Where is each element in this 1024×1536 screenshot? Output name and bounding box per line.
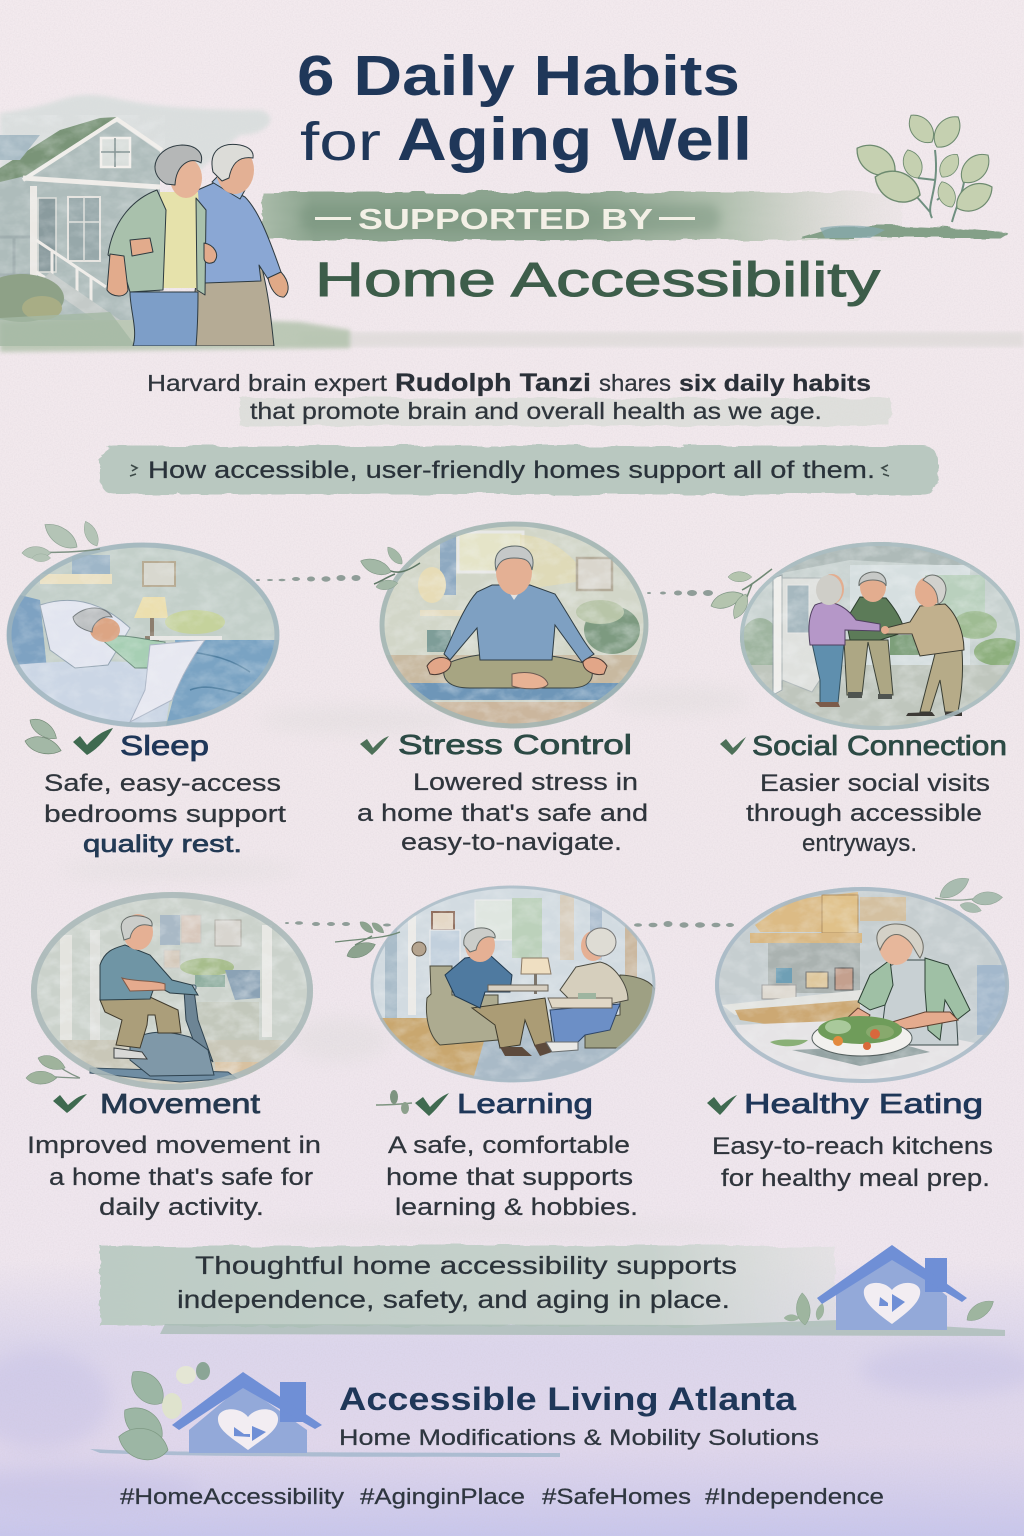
learning: heading and text: home that supports [386, 1164, 633, 1191]
title: 6 Daily Habits [297, 44, 740, 108]
stress control: heading and text [357, 729, 648, 856]
intro text: Rudolph Tanzi [395, 369, 591, 397]
house [0, 115, 165, 320]
social connection: heading and text: entryways. [802, 830, 917, 857]
healthy eating: heading and text [707, 1088, 993, 1192]
icon: leaves and check [376, 1090, 449, 1116]
healthy eating: heading and text: Easy-to-reach kitchens [712, 1133, 993, 1160]
social connection: heading and text [720, 730, 1007, 857]
sleep: heading and text: quality rest. [83, 831, 242, 858]
hashtags: #HomeAccessibility [120, 1484, 344, 1509]
panel: movement illustration [30, 890, 315, 1090]
movement: heading and text: Improved movement in [27, 1132, 321, 1159]
footer company name [339, 1381, 819, 1450]
callout band: How accessible, user-friendly homes support all of them. [148, 457, 875, 484]
sleep: heading and text: Safe, easy-access [44, 770, 281, 797]
leaves: stress branch [358, 544, 420, 591]
leaves: sleep branch [22, 518, 102, 562]
social connection: heading and text: through accessible [746, 800, 982, 827]
bushes [0, 274, 133, 346]
sleep: heading and text: Sleep [120, 730, 209, 761]
closing band [100, 1246, 1005, 1336]
banner: supported by [262, 192, 1008, 240]
icon: check [720, 737, 746, 755]
banner label: SUPPORTED BY [358, 204, 653, 236]
hashtags: #AginginPlace [360, 1484, 525, 1509]
movement: heading and text: Movement [100, 1088, 260, 1119]
closing band: Thoughtful home accessibility supports [195, 1252, 737, 1280]
sleep: heading and text: bedrooms support [44, 801, 286, 828]
connector dots row 2 [285, 921, 734, 928]
movement: heading and text: daily activity. [99, 1194, 264, 1221]
learning: heading and text [376, 1088, 638, 1221]
stress control: heading and text: Stress Control [398, 729, 632, 760]
panel: sleep illustration [0, 540, 285, 730]
stress control: heading and text: Lowered stress in [413, 769, 638, 796]
icon: leaves and check [23, 714, 113, 758]
icon: check [707, 1095, 737, 1115]
leaves: learning branch [335, 919, 400, 962]
connector dots row 1 [256, 575, 713, 596]
learning: heading and text: learning & hobbies. [395, 1194, 638, 1221]
panel: stress control illustration [380, 520, 650, 732]
leaves: movement branch [26, 1052, 80, 1084]
intro text [147, 369, 890, 426]
three seniors greeting [809, 572, 964, 716]
intro text: shares [599, 370, 671, 396]
panel: healthy eating illustration [715, 885, 1011, 1085]
banner label [315, 204, 695, 236]
footer logo: house and plant [90, 1362, 560, 1465]
learning: heading and text: A safe, comfortable [388, 1132, 630, 1159]
leaves: social branch [708, 569, 772, 621]
woman [107, 145, 217, 346]
hashtags: #SafeHomes [542, 1484, 691, 1509]
icon: check [53, 1094, 87, 1113]
hero illustration: house and couple [0, 115, 288, 352]
leaves: eating branch [935, 873, 1003, 915]
leafy plant top right [850, 109, 998, 222]
healthy eating: heading and text: for healthy meal prep. [721, 1165, 990, 1192]
icon: house with heart [784, 1245, 997, 1330]
man meditating [427, 546, 607, 689]
title: Aging Well [397, 106, 752, 173]
hashtags [120, 1484, 884, 1509]
intro text: six daily habits [679, 370, 871, 396]
social connection: heading and text: Social Connection [752, 730, 1007, 761]
intro text: Harvard brain expert [147, 370, 388, 396]
title [297, 44, 752, 173]
callout band [100, 446, 938, 494]
panel: social connection illustration [738, 540, 1024, 735]
senior on recumbent bike [90, 914, 236, 1082]
hashtags: #Independence [705, 1484, 884, 1509]
learning: heading and text: Learning [457, 1088, 593, 1119]
man [187, 144, 288, 346]
closing band: independence, safety, and aging in place. [177, 1286, 730, 1314]
stress control: heading and text: easy-to-navigate. [401, 829, 622, 856]
intro text: that promote brain and overall health as we age. [250, 398, 822, 424]
salad plate [770, 1016, 912, 1056]
icon: check [360, 736, 389, 755]
panel: learning illustration [370, 884, 660, 1090]
hero background mist and ground strip [0, 95, 1024, 352]
sleep: heading and text [23, 714, 286, 858]
title: for [300, 112, 381, 172]
footer company name: Accessible Living Atlanta [339, 1381, 796, 1417]
subtitle: home accessibility: Home Accessibility [315, 254, 880, 307]
healthy eating: heading and text: Healthy Eating [744, 1088, 983, 1119]
stress control: heading and text: a home that's safe and [357, 800, 648, 827]
woman preparing salad [844, 924, 970, 1045]
movement: heading and text [27, 1088, 321, 1221]
footer company name: Home Modifications & Mobility Solutions [339, 1425, 819, 1450]
movement: heading and text: a home that's safe for [49, 1164, 313, 1191]
two seniors seated [445, 928, 628, 1056]
social connection: heading and text: Easier social visits [760, 770, 990, 797]
